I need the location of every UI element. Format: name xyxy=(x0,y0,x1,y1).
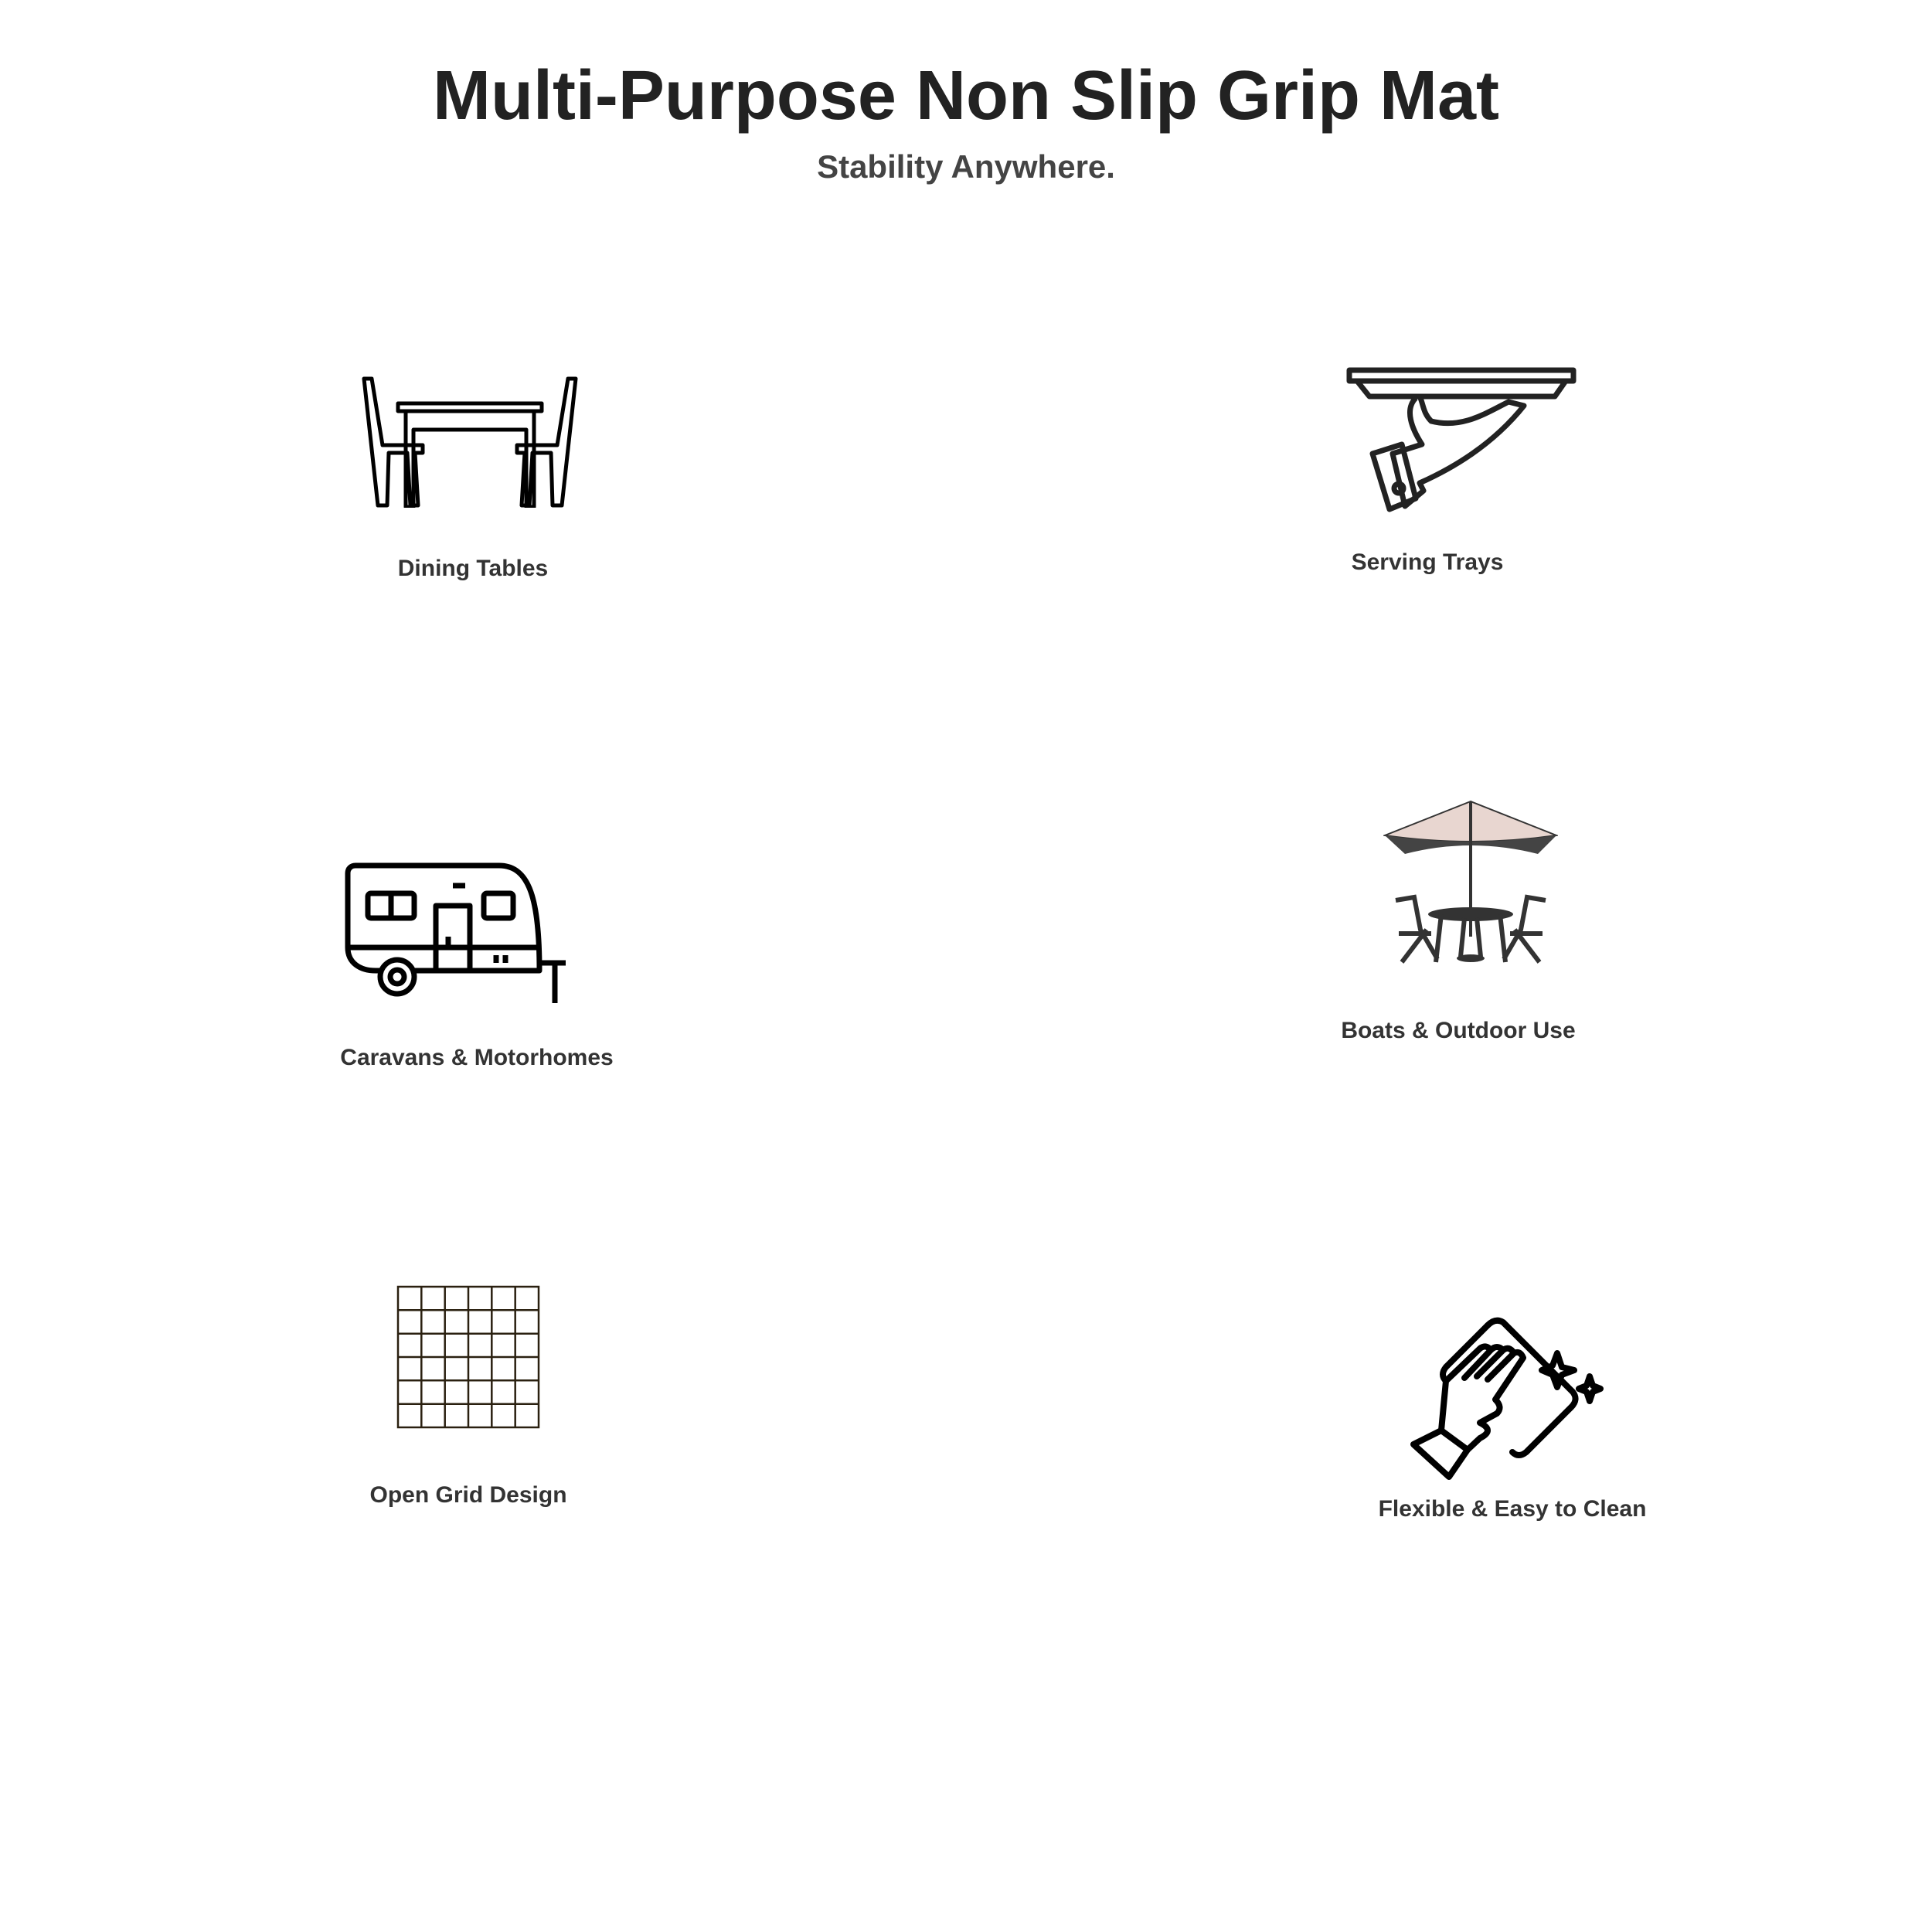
title: Multi-Purpose Non Slip Grip Mat xyxy=(433,57,1499,134)
label: open grid: Open Grid Design xyxy=(369,1482,567,1508)
label: boats & outdoor: Boats & Outdoor Use xyxy=(1341,1018,1576,1043)
icon: grid xyxy=(397,1286,539,1428)
icon: caravan xyxy=(345,862,566,1003)
label: flexible & easy: Flexible & Easy to Clean xyxy=(1379,1496,1646,1522)
subtitle: Stability Anywhere. xyxy=(817,148,1115,185)
icon: patio umbrella xyxy=(1383,801,1558,964)
icon: cleaning hand xyxy=(1410,1317,1604,1480)
label: serving trays: Serving Trays xyxy=(1352,549,1503,575)
icon: dining table xyxy=(362,377,578,508)
icon: serving tray xyxy=(1346,368,1577,512)
label: dining tables: Dining Tables xyxy=(398,556,548,581)
label: caravans: Caravans & Motorhomes xyxy=(340,1045,614,1070)
